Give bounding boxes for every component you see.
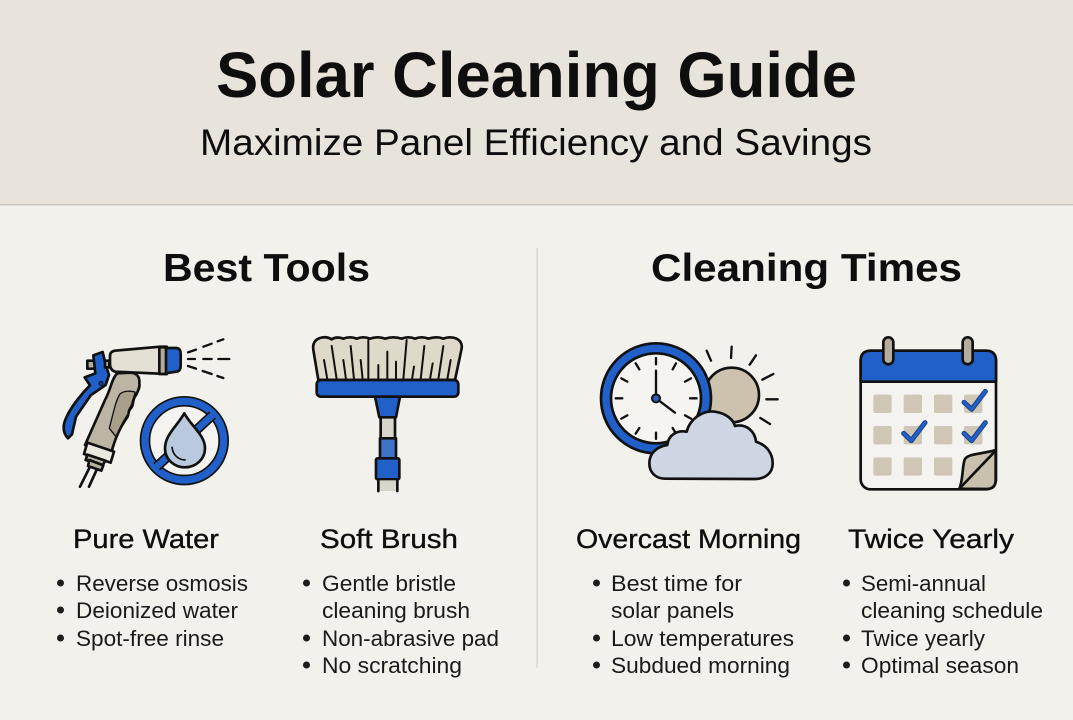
list: pure water	[57, 571, 248, 651]
list: twice yearly: Optimal season	[861, 653, 1019, 678]
list: twice yearly: Semi-annual	[861, 571, 986, 596]
list: pure water: Reverse osmosis	[76, 571, 248, 596]
icon: calendar with checkmarks	[861, 337, 996, 489]
list: twice yearly: Twice yearly	[861, 626, 986, 651]
icon: spray gun with no-mineral water drop	[64, 339, 229, 487]
panel: best tools	[57, 247, 499, 678]
list: overcast morning: Best time for	[611, 571, 743, 596]
list: overcast morning	[593, 571, 794, 678]
heading: best tools: Best Tools	[163, 247, 370, 290]
label: soft brush: Soft Brush	[320, 524, 458, 554]
list: pure water: Spot-free rinse	[76, 626, 224, 651]
list: overcast morning: Low temperatures	[611, 626, 794, 651]
label: overcast morning: Overcast Morning	[576, 524, 801, 554]
list: twice yearly	[843, 571, 1043, 678]
list: soft brush: No scratching	[322, 653, 462, 678]
list: soft brush: cleaning brush	[322, 598, 470, 623]
list: soft brush: Non-abrasive pad	[322, 626, 499, 651]
label: twice yearly: Twice Yearly	[848, 524, 1015, 554]
subtitle: Maximize Panel Efficiency and Savings	[200, 122, 872, 163]
panel: cleaning times	[576, 247, 1043, 678]
icon: clock, sun and cloud	[601, 343, 778, 479]
list: pure water: Deionized water	[76, 598, 238, 623]
list: twice yearly: cleaning schedule	[861, 598, 1043, 623]
heading: cleaning times: Cleaning Times	[651, 247, 962, 290]
title: Solar Cleaning Guide	[216, 39, 857, 111]
list: soft brush	[303, 571, 499, 678]
label: pure water: Pure Water	[73, 524, 219, 554]
icon: soft brush	[313, 337, 462, 491]
list: overcast morning: Subdued morning	[611, 653, 790, 678]
header banner	[0, 0, 1073, 205]
list: soft brush: Gentle bristle	[322, 571, 456, 596]
list: overcast morning: solar panels	[611, 598, 734, 623]
